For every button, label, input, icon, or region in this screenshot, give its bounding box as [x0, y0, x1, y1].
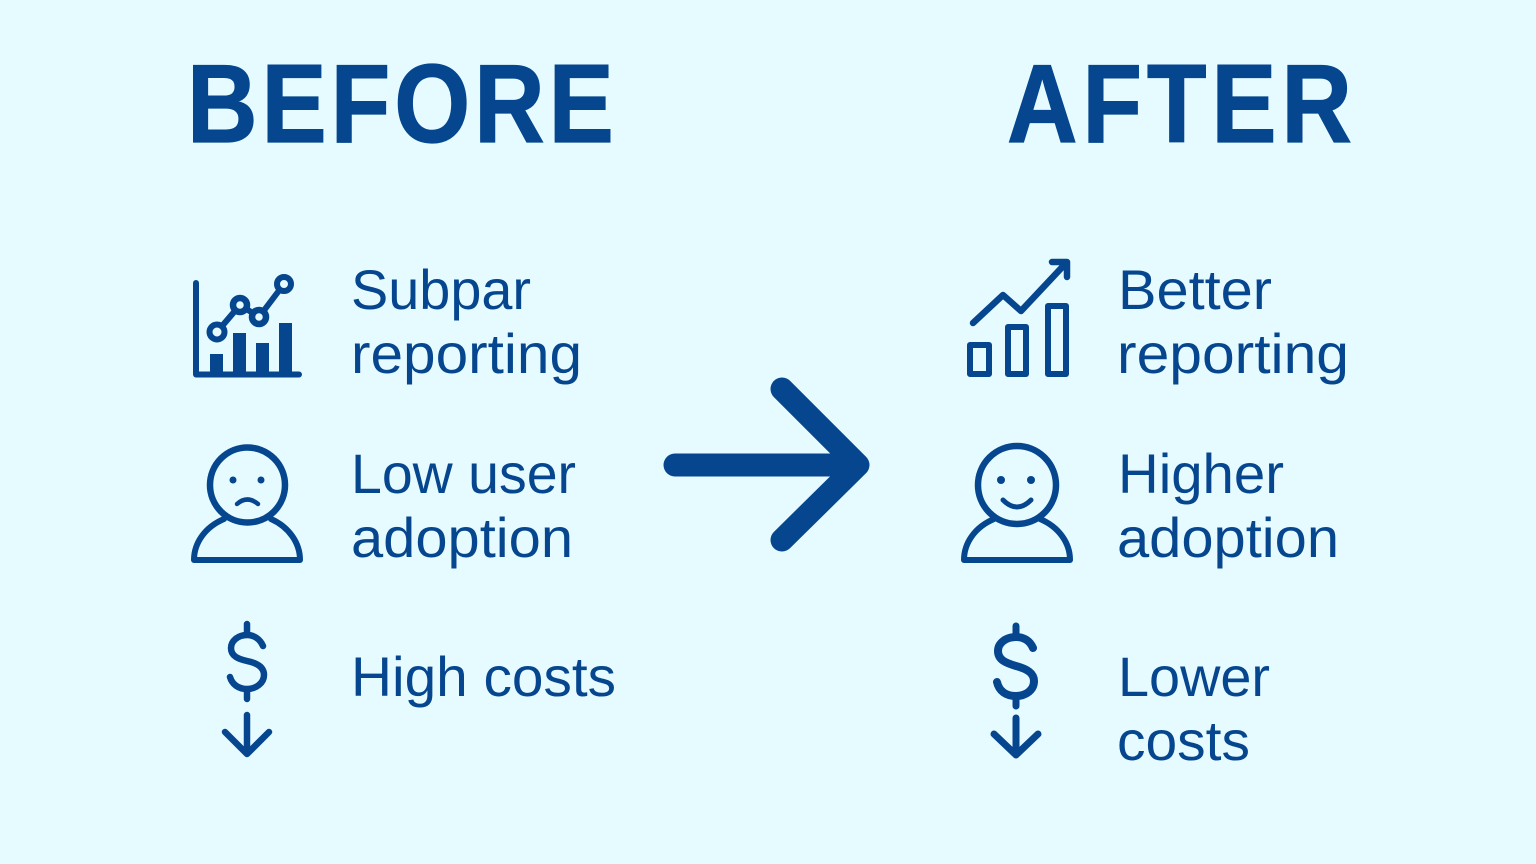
text: higher adoption: Higher	[1118, 442, 1284, 505]
panel: after column	[964, 258, 1349, 772]
text: subpar reporting: Subpar	[351, 258, 531, 321]
icon: dollar with down arrow	[225, 624, 269, 754]
arrow: before to after	[675, 389, 858, 540]
text: higher adoption: adoption	[1117, 506, 1339, 569]
text: lower costs: Lower	[1118, 645, 1270, 708]
icon: declining line and bar chart	[196, 277, 299, 375]
text: better reporting	[1117, 258, 1349, 385]
text: better reporting: Better	[1118, 258, 1272, 321]
text: low user adoption: adoption	[351, 506, 573, 569]
text: higher adoption	[1117, 442, 1339, 569]
panel: before column	[194, 258, 616, 754]
heading: after: AFTER	[1007, 42, 1357, 166]
text: low user adoption: Low user	[351, 442, 576, 505]
text: lower costs	[1117, 645, 1270, 772]
text: better reporting: reporting	[1117, 322, 1349, 385]
text: low user adoption	[351, 442, 576, 569]
icon: happy user	[964, 446, 1070, 560]
text: lower costs: costs	[1117, 709, 1250, 772]
heading: before: BEFORE	[187, 42, 618, 166]
text: high costs: High costs	[351, 645, 616, 708]
text: subpar reporting: reporting	[351, 322, 582, 385]
icon: dollar with down arrow	[994, 626, 1038, 755]
text: subpar reporting	[351, 258, 582, 385]
icon: sad user	[194, 448, 300, 560]
icon: rising line and bar chart	[970, 262, 1067, 374]
